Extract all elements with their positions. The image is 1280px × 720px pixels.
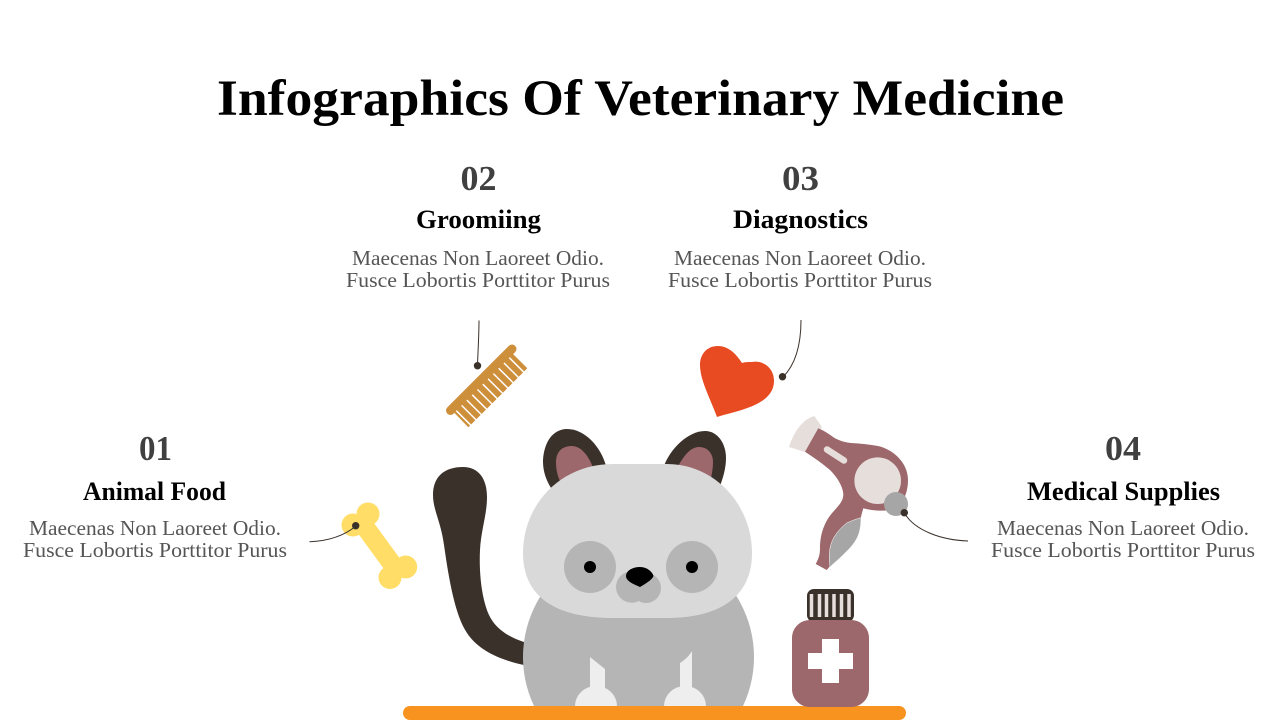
leader line: animal food — [310, 522, 359, 542]
panel: 01 animal food — [23, 429, 287, 562]
cat muzzle — [616, 571, 661, 603]
icon: comb — [450, 349, 527, 427]
leader line: grooming — [474, 320, 481, 369]
heading: medical supplies: Medical Supplies — [1027, 477, 1220, 506]
text block: diagnostics: Maecenas Non Laoreet Odio. — [674, 246, 926, 270]
panel: 04 medical supplies — [991, 429, 1255, 562]
text block: animal food: Maecenas Non Laoreet Odio. — [29, 516, 281, 540]
heading: grooming: Groomiing — [416, 205, 541, 234]
cat nose — [626, 567, 654, 587]
cat left ear — [543, 429, 606, 488]
text block: medical supplies — [991, 516, 1255, 562]
text block: diagnostics — [668, 246, 932, 292]
text block: grooming — [346, 246, 610, 292]
icon: heart — [700, 346, 774, 417]
icon: bone — [342, 502, 417, 589]
text block: grooming: Maecenas Non Laoreet Odio. — [352, 246, 604, 270]
panel: 03 diagnostics — [668, 159, 932, 292]
cat right ear — [664, 431, 726, 486]
panel: 02 grooming — [346, 159, 610, 292]
icon: medicine bottle — [792, 589, 869, 707]
text block: grooming: Fusce Lobortis Porttitor Purus — [346, 268, 610, 292]
cat head — [523, 464, 752, 618]
bottle cap — [807, 589, 854, 622]
bottle body — [792, 620, 869, 707]
icon: cat illustration — [433, 429, 754, 706]
heading: diagnostics: Diagnostics — [733, 205, 868, 234]
table bar — [403, 706, 906, 720]
number 03: 03 — [782, 159, 819, 198]
title: Infographics Of Veterinary Medicine — [217, 71, 1064, 127]
text block: animal food — [23, 516, 287, 562]
cat tail — [433, 467, 524, 665]
leader line: medical supplies — [901, 509, 968, 541]
leader line: diagnostics — [779, 320, 801, 380]
number 01: 01 — [139, 429, 172, 468]
cat eyes — [564, 541, 718, 593]
medical cross — [808, 639, 853, 683]
text block: diagnostics: Fusce Lobortis Porttitor Purus — [668, 268, 932, 292]
heading: animal food: Animal Food — [83, 477, 227, 506]
icon: hair dryer — [789, 416, 908, 570]
number 02: 02 — [460, 159, 496, 198]
cat body — [523, 542, 754, 706]
text block: animal food: Fusce Lobortis Porttitor Purus — [23, 538, 287, 562]
number 04: 04 — [1105, 429, 1141, 468]
text block: medical supplies: Fusce Lobortis Porttitor Purus — [991, 538, 1255, 562]
text block: medical supplies: Maecenas Non Laoreet Odio. — [997, 516, 1249, 540]
